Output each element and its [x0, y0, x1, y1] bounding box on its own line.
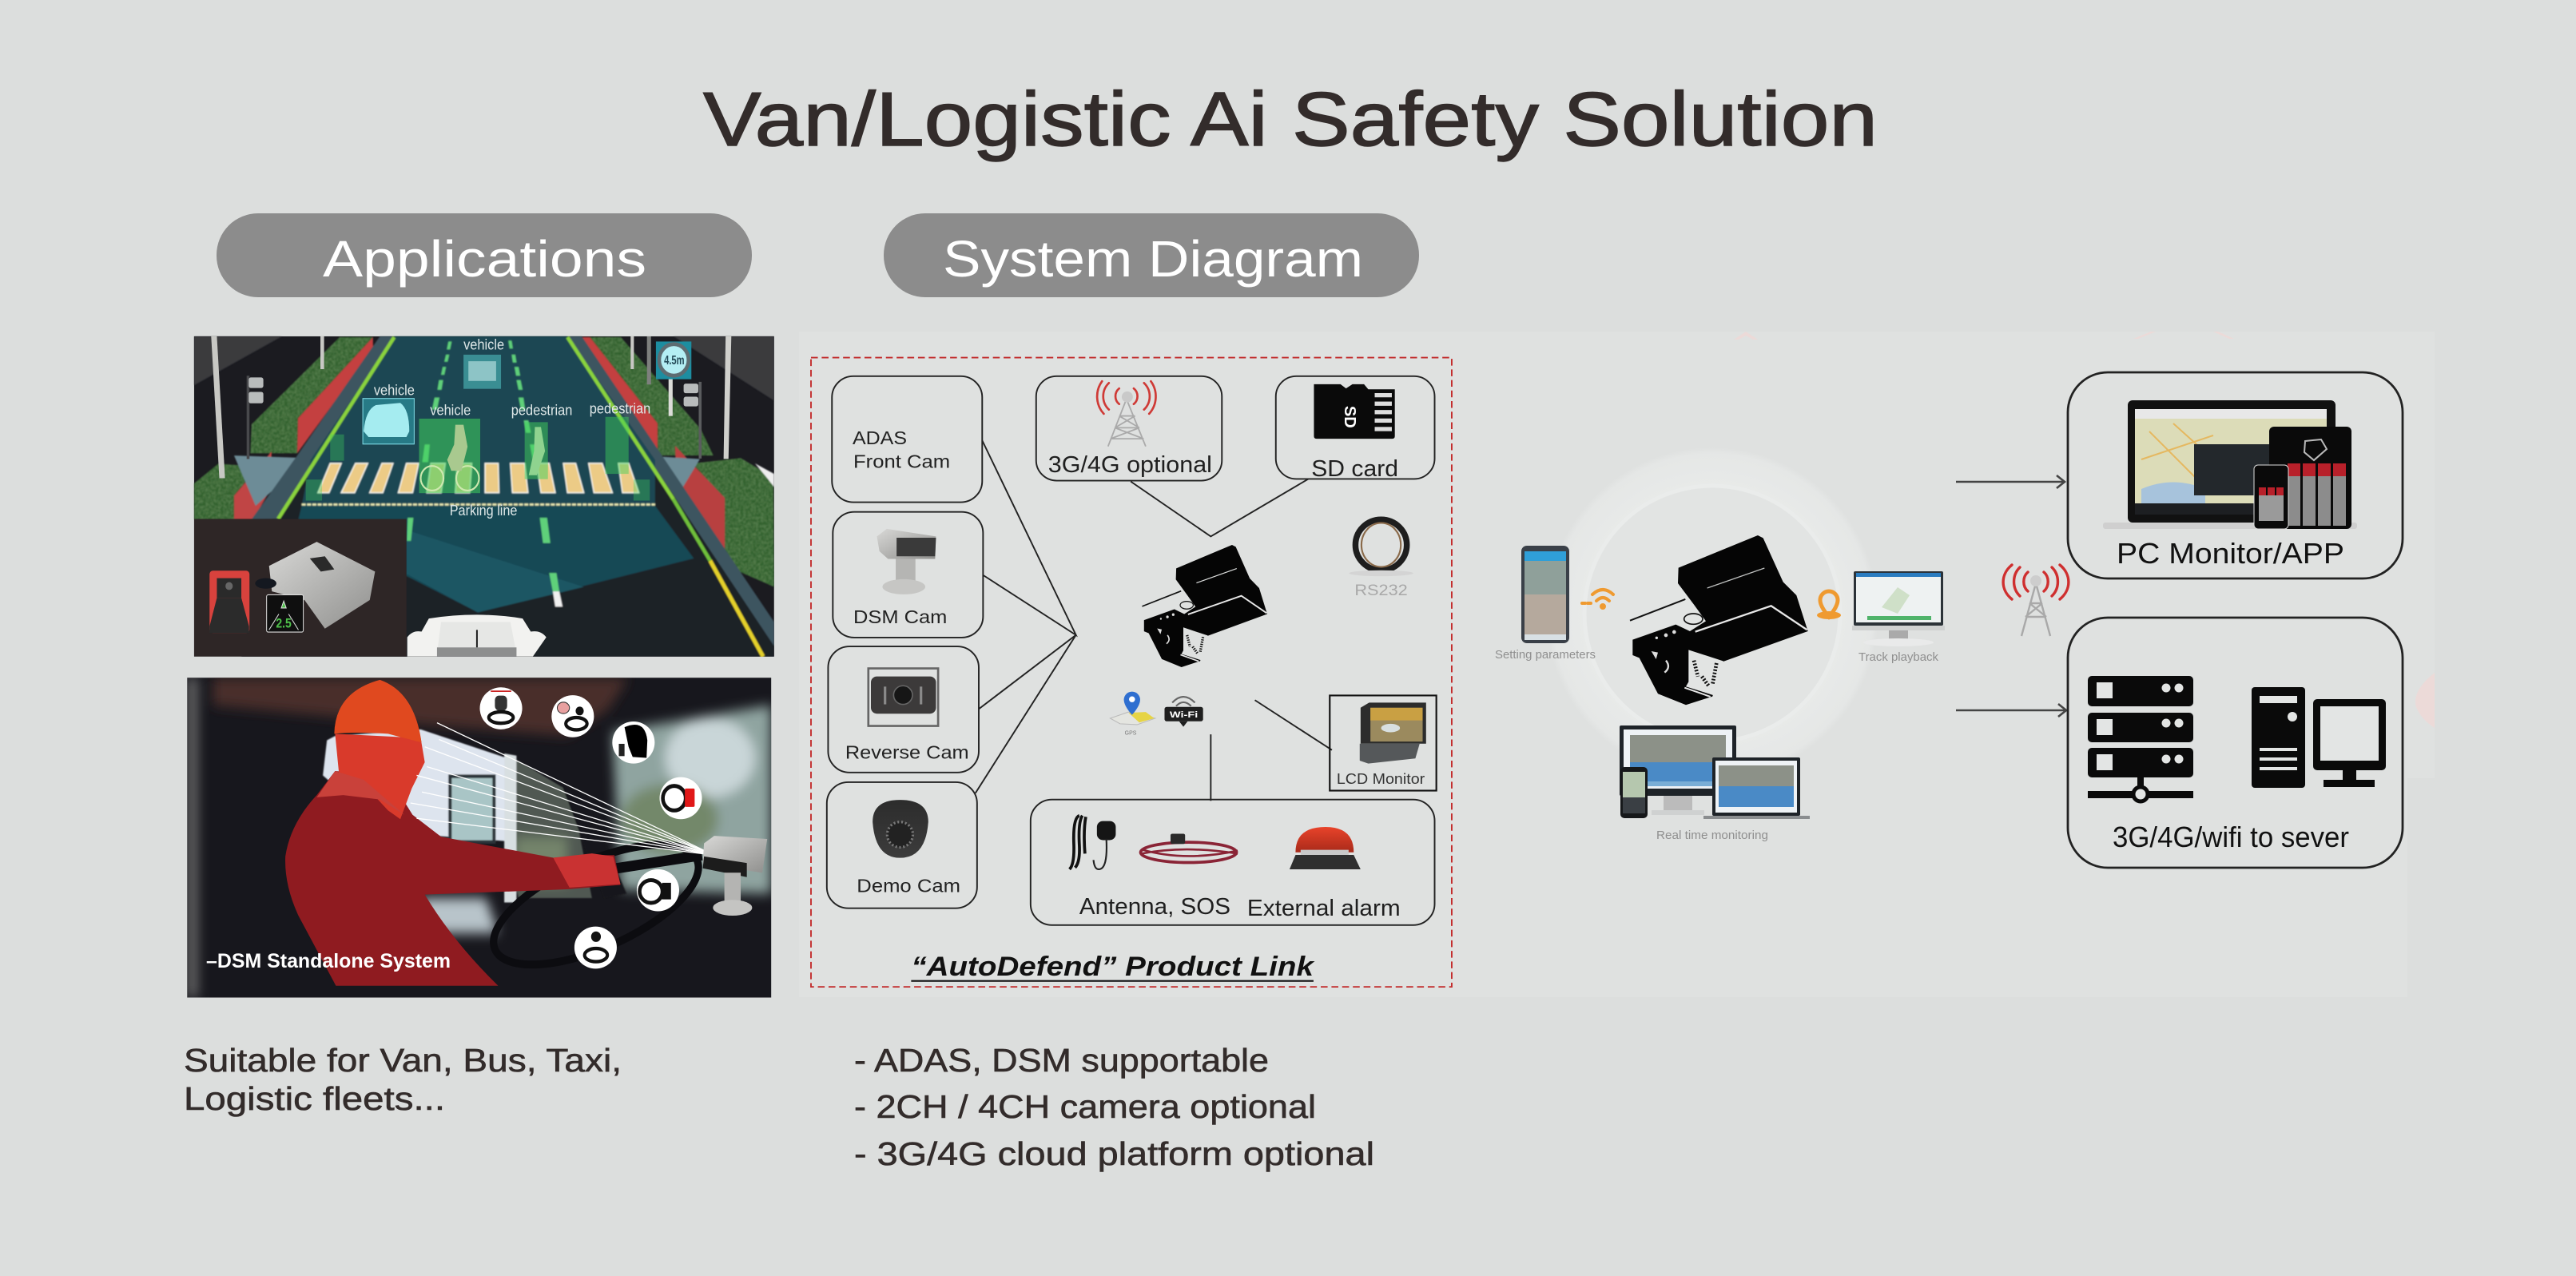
driver silhouette	[285, 680, 621, 986]
text block: applications description: Suitable for Van, Bus, Taxi,	[184, 1042, 622, 1079]
text block: system features	[854, 1042, 1374, 1172]
label: AutoDefend Product Link: “AutoDefend” Product Link	[911, 952, 1315, 982]
icon: server rack	[2088, 676, 2193, 801]
arrow: to server	[1956, 704, 2066, 717]
box: ADAS Front Cam	[832, 376, 982, 503]
icon: monitor, track playback: Track playback	[1858, 650, 1938, 664]
icon: monitor, track playback	[1852, 571, 1945, 664]
inset: ADAS hardware: 2.5	[276, 617, 292, 631]
icon: GPS: GPS	[1125, 731, 1137, 737]
box: DSM Cam: DSM Cam	[853, 606, 947, 627]
box: antenna, SOS, external alarm: External alarm	[1247, 895, 1401, 921]
icon: central device	[1142, 545, 1267, 667]
icon: orange wifi	[1582, 590, 1613, 608]
road labels: vehicle	[374, 382, 415, 398]
icon: RS232 cable: RS232	[1354, 582, 1408, 599]
box: 3G/4G/wifi to server: 3G/4G/wifi to sever	[2113, 821, 2349, 853]
inset: ADAS hardware	[194, 519, 407, 657]
box: DSM Cam	[833, 512, 983, 638]
icon: Wi-Fi	[1164, 697, 1203, 727]
car hood	[407, 614, 547, 657]
box: Reverse Cam: Reverse Cam	[845, 741, 969, 762]
box: 3G/4G optional	[1036, 376, 1222, 481]
box: SD card: SD card	[1311, 455, 1398, 482]
box: 3G/4G/wifi to server	[2068, 618, 2403, 868]
road labels: Parking line	[450, 503, 517, 519]
DSM camera	[703, 836, 767, 916]
icon: RS232 cable	[1349, 519, 1413, 599]
box: ADAS Front Cam: Front Cam	[853, 451, 950, 472]
connector lines	[976, 440, 1332, 801]
panel: product link accessories	[911, 692, 1437, 982]
box: Demo Cam: Demo Cam	[857, 876, 960, 896]
behaviour icons	[480, 687, 702, 968]
box: PC Monitor/APP	[2068, 372, 2403, 578]
icon: Wi-Fi: Wi-Fi	[1170, 710, 1198, 720]
detection boxes	[306, 355, 650, 501]
road labels: vehicle	[430, 402, 471, 419]
box: antenna, SOS, external alarm	[1031, 800, 1435, 925]
box: LCD Monitor	[1330, 695, 1437, 791]
road labels: vehicle	[463, 336, 504, 352]
box: Reverse Cam	[828, 646, 979, 773]
heading pill: System Diagram	[884, 213, 1419, 297]
blurred cabin background	[187, 678, 771, 998]
icon: monitors, real time monitoring: Real time monitoring	[1656, 829, 1768, 842]
box: ADAS Front Cam: ADAS	[853, 427, 907, 448]
title: Van/Logistic Ai Safety Solution	[703, 77, 1878, 162]
box: SD card: SD	[1341, 406, 1358, 428]
dashed border	[811, 358, 1452, 987]
text block: applications description	[184, 1042, 622, 1117]
icon: laptop, tablet and phone	[2103, 400, 2357, 529]
traffic lights and sign	[211, 336, 731, 479]
traffic lights and sign: 4.5m	[664, 355, 685, 368]
road labels	[374, 336, 650, 519]
icon: phone, setting parameters: Setting parameters	[1495, 648, 1596, 662]
icon: cloud-connected device	[1630, 535, 1808, 705]
caption: DSM Standalone System: –DSM Standalone System	[206, 950, 451, 972]
icon: desktop computer	[2252, 687, 2386, 788]
heading pill: Applications	[217, 213, 752, 297]
text block: system features: - 2CH / 4CH camera optional	[854, 1088, 1316, 1125]
icon: GPS	[1110, 692, 1155, 737]
box: Demo Cam	[827, 782, 977, 908]
panel: system diagram background	[799, 332, 2435, 997]
panel: DSM driver scene	[187, 678, 771, 998]
box: 3G/4G optional: 3G/4G optional	[1048, 451, 1212, 478]
box: SD card	[1276, 376, 1435, 482]
box: antenna, SOS, external alarm: Antenna, SOS	[1079, 893, 1230, 920]
text block: applications description: Logistic fleets...	[184, 1080, 445, 1117]
heading pill: System Diagram: System Diagram	[943, 230, 1363, 288]
box: LCD Monitor: LCD Monitor	[1337, 770, 1425, 787]
box: PC Monitor/APP: PC Monitor/APP	[2117, 537, 2344, 570]
panel: ADAS road scene	[194, 336, 774, 657]
steering wheel	[490, 841, 703, 968]
text block: system features: - 3G/4G cloud platform optional	[854, 1135, 1374, 1172]
icon: cell tower	[2003, 565, 2069, 636]
rings behind device	[1546, 447, 1878, 780]
sensing rays	[411, 723, 714, 855]
text block: system features: - ADAS, DSM supportable	[854, 1042, 1269, 1079]
heading pill: Applications: Applications	[323, 230, 646, 288]
icon: phone, setting parameters	[1495, 546, 1596, 662]
icon: monitors, real time monitoring	[1620, 725, 1810, 842]
arrow: to PC monitor	[1956, 475, 2065, 488]
road labels: pedestrian	[511, 402, 572, 419]
road labels: pedestrian	[590, 400, 650, 417]
icon: orange location pin	[1817, 591, 1841, 619]
panel: AutoDefend product link	[811, 358, 1452, 987]
